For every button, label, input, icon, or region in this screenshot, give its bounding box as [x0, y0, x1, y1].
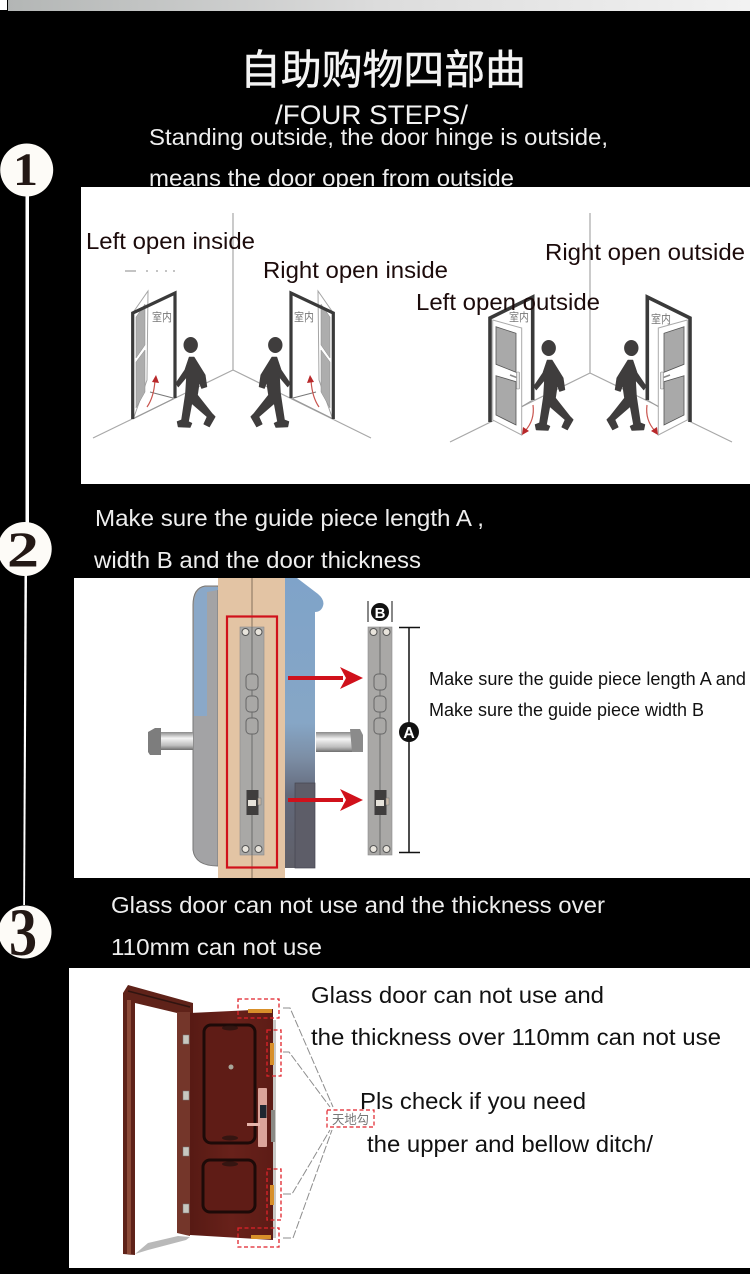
- orange hooks: [248, 1009, 274, 1239]
- step 3 badge: 3: [9, 894, 37, 970]
- label: right open outside: Right open outside: [545, 239, 745, 265]
- lock diagram: outer lock body: [284, 578, 323, 868]
- dimension A marker: [399, 627, 420, 852]
- faint marks: [125, 270, 175, 272]
- person 1: [176, 337, 215, 427]
- note line 2: the thickness over 110mm can not use: [311, 1024, 721, 1050]
- step 1 instruction text: [149, 124, 608, 191]
- door leaf: [190, 1009, 273, 1240]
- panel: door opening directions: [81, 187, 750, 484]
- guide piece note line 1: Make sure the guide piece length A and: [429, 669, 746, 689]
- label: right open inside: Right open inside: [263, 257, 448, 283]
- step 3 badge: [0, 894, 52, 970]
- dimension B marker: [368, 601, 392, 622]
- note line 3: Pls check if you need: [360, 1088, 586, 1114]
- step 3 instruction text: Glass door can not use and the thickness over: [111, 892, 605, 918]
- door frame: [123, 985, 193, 1255]
- left handle: [148, 728, 193, 755]
- step 3 instruction text: 110mm can not use: [111, 934, 322, 960]
- room label on right outside door: 室内: [651, 312, 671, 326]
- lower door panel: [203, 1160, 255, 1212]
- guide piece note line 2: Make sure the guide piece width B: [429, 700, 704, 720]
- step 2 instruction text: Make sure the guide piece length A ,: [95, 505, 484, 531]
- room label on left outside door: 室内: [509, 310, 529, 324]
- lock diagram: inner lock body: [193, 586, 218, 866]
- lock diagram: door edge: [218, 578, 285, 878]
- left corner walls: [93, 213, 371, 438]
- grey dashed leader lines: [283, 1008, 333, 1238]
- red dashed hook markers: [238, 999, 281, 1247]
- peephole: [228, 1064, 234, 1070]
- step 1 badge: [0, 144, 53, 196]
- guide piece on door: [240, 627, 264, 855]
- right open inside door: [291, 291, 333, 419]
- step connector line 1 to 2: [26, 190, 29, 525]
- step 2 instruction text: [93, 505, 484, 573]
- red highlight box: [227, 616, 277, 868]
- detached guide piece: [368, 627, 392, 855]
- person 2: [251, 337, 290, 427]
- door edge: [273, 1020, 276, 1238]
- person 4: [607, 340, 646, 430]
- step 1 badge: 1: [13, 144, 38, 196]
- arrow to guide piece bottom: [288, 789, 363, 811]
- hinges: [183, 1035, 189, 1213]
- hook label: 天地勾: [332, 1112, 369, 1127]
- room label on right inside door: 室内: [294, 310, 314, 324]
- left open outside door: [490, 297, 533, 435]
- label: left open inside: Left open inside: [86, 228, 255, 254]
- step 1 instruction text: Standing outside, the door hinge is outside,: [149, 124, 608, 150]
- note line 4: the upper and bellow ditch/: [367, 1131, 653, 1157]
- title: 自助购物四部曲: [240, 47, 526, 93]
- label: left open outside: Left open outside: [416, 289, 600, 315]
- dimension A marker: A: [403, 725, 415, 742]
- step 3 instruction text: [111, 892, 605, 960]
- right corner walls: [450, 213, 732, 442]
- top image strip: [0, 0, 750, 11]
- panel: door compatibility: [69, 968, 750, 1268]
- right handle: [316, 729, 363, 752]
- door edge latch: [271, 1110, 275, 1142]
- step 1 instruction text: means the door open from outside: [149, 165, 514, 191]
- subtitle: /FOUR STEPS/: [275, 100, 469, 130]
- left open inside door: [133, 291, 175, 419]
- step 2 instruction text: width B and the door thickness: [93, 547, 421, 573]
- lock diagram: battery cover: [295, 783, 315, 868]
- smart lock: [247, 1088, 267, 1147]
- room label on left inside door: 室内: [152, 310, 172, 324]
- arrow to guide piece top: [288, 667, 363, 689]
- person 3: [534, 340, 573, 430]
- step connector line 2 to 3: [23, 575, 27, 905]
- panel: guide piece measurement: [74, 578, 750, 878]
- step 2 badge: 2: [7, 521, 39, 577]
- panel ornaments: [222, 1026, 238, 1166]
- right open outside door: [647, 297, 690, 435]
- upper door panel: [204, 1025, 255, 1143]
- dimension B marker: B: [375, 605, 386, 622]
- note line 1: Glass door can not use and: [311, 982, 604, 1008]
- step 2 badge: [0, 521, 52, 577]
